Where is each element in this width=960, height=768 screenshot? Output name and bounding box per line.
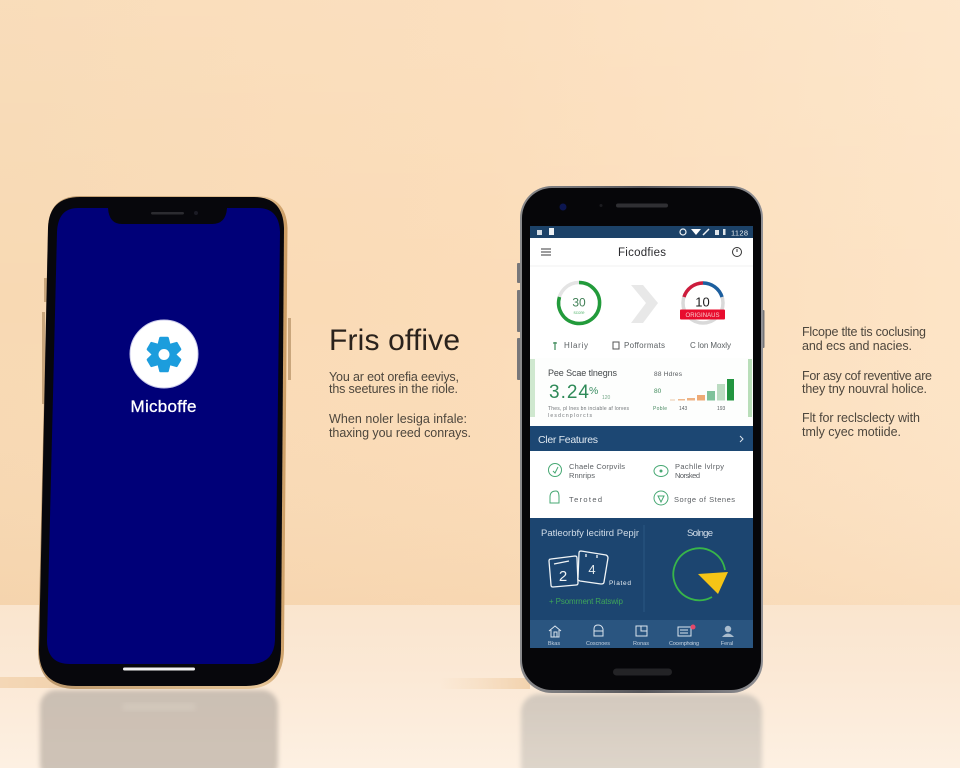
right phone bezel <box>522 188 761 690</box>
green progress ring <box>558 282 600 324</box>
icon: home <box>549 626 561 637</box>
mini bar chart <box>670 379 734 400</box>
icon: gear <box>147 338 181 371</box>
right phone sensor <box>600 204 602 207</box>
right phone home button <box>613 668 672 676</box>
performance card: Poble <box>653 406 667 412</box>
right text block: Flcope tlte tis coclusing <box>802 325 926 339</box>
red and blue gauge: 10 <box>695 294 710 310</box>
metric tabs: Hlariy <box>564 341 588 350</box>
right text block: Flt for reclsclecty with <box>802 411 920 425</box>
navigation labels: Coscnoes <box>586 641 610 647</box>
app name: Micboffe <box>130 397 196 416</box>
left phone screen <box>47 208 280 664</box>
right phone <box>517 186 764 693</box>
icon: lock <box>594 625 603 636</box>
icon: card <box>678 627 691 636</box>
performance card: Pee Scae tlnegns <box>548 368 618 378</box>
performance card: 193 <box>717 406 726 412</box>
center text block: When noler lesiga infale: <box>329 412 467 426</box>
bottom navigation <box>530 620 753 648</box>
performance card: 88 Hdres <box>654 371 683 378</box>
icon: cards <box>549 551 608 587</box>
red and blue gauge <box>680 283 725 323</box>
green progress ring: score <box>573 310 585 315</box>
navigation labels: Ronas <box>633 641 649 647</box>
metric tabs <box>553 341 731 350</box>
right phone speaker <box>616 204 668 208</box>
performance card: 143 <box>679 406 688 412</box>
lower navy panel <box>530 518 753 620</box>
notification dot <box>690 624 696 630</box>
center text block: You ar eot orefia eeviys, <box>329 370 459 384</box>
features list: Rnnrips <box>569 471 595 480</box>
features list: Norsked <box>675 471 700 480</box>
icon: user <box>722 626 734 637</box>
right phone camera <box>560 204 566 210</box>
app header <box>541 247 742 259</box>
chevron arrow <box>631 285 658 323</box>
features list: Pachlle lvlrpy <box>675 462 724 471</box>
performance card: 80 <box>654 388 662 395</box>
features list: Sorge of Stenes <box>674 495 735 504</box>
right phone reflection <box>521 694 762 768</box>
features header <box>530 426 753 451</box>
right text block: tmly cyec motiide. <box>802 425 901 439</box>
app logo <box>130 320 198 388</box>
center text block <box>329 370 471 440</box>
right phone side buttons <box>517 263 764 380</box>
center text block: thaxing you reed conrays. <box>329 426 471 440</box>
status bar <box>530 226 753 238</box>
right text block: and ecs and nacies. <box>802 339 912 353</box>
performance card: lesdcnplorcts <box>548 413 592 419</box>
right phone frame <box>520 186 763 693</box>
navigation labels: Feral <box>721 641 733 647</box>
navigation labels: Bkas <box>548 641 560 647</box>
app header: Ficodfies <box>618 247 666 259</box>
red and blue gauge: ORIGINAUS <box>686 313 720 319</box>
navigation labels <box>548 641 733 647</box>
navigation labels: Cocenphoing <box>669 641 699 647</box>
performance card <box>530 358 753 426</box>
features list <box>530 451 753 518</box>
status bar: 1128 <box>731 228 748 238</box>
performance card: 120 <box>602 395 611 401</box>
left phone speaker <box>151 212 184 214</box>
icon: cards: 2 <box>559 568 567 585</box>
lower navy panel: Solnge <box>687 528 713 539</box>
lower navy panel: + Psomrnent Ratswip <box>549 597 624 606</box>
lower navy panel: Plated <box>609 580 631 587</box>
table surface <box>0 605 960 768</box>
app screen <box>530 226 753 648</box>
metric tabs: Pofformats <box>624 341 665 350</box>
left phone <box>38 196 291 689</box>
green progress ring: 30 <box>572 296 586 310</box>
features header: Cler Features <box>538 434 598 446</box>
left phone side buttons <box>42 278 291 404</box>
left phone reflection <box>40 690 278 768</box>
performance card: 3.24 <box>549 382 589 403</box>
icon: cards: 4 <box>588 562 596 577</box>
left phone home bar <box>123 668 195 670</box>
features list: Chaele Corpvils <box>569 462 625 471</box>
features list: Teroted <box>569 495 602 504</box>
center heading: Fris offive <box>329 324 460 357</box>
left phone black bezel <box>39 197 284 686</box>
right text block <box>802 325 932 439</box>
metric tabs: C lon Moxly <box>690 341 731 350</box>
background wall <box>0 0 960 606</box>
center text block: ths seetures in the riole. <box>329 382 458 396</box>
right text block: they tny nouvral holice. <box>802 382 927 396</box>
performance card: % <box>589 385 598 397</box>
lower navy panel: Patleorbfy lecitird Pepjr <box>541 528 639 539</box>
pie gauge <box>673 548 728 600</box>
icon: box <box>636 626 647 636</box>
left phone gold frame <box>38 196 288 689</box>
left phone camera <box>194 211 198 215</box>
performance card: Thes, pl lnes bn inciable af lorves <box>548 406 630 412</box>
right text block: For asy cof reventive are <box>802 369 932 383</box>
